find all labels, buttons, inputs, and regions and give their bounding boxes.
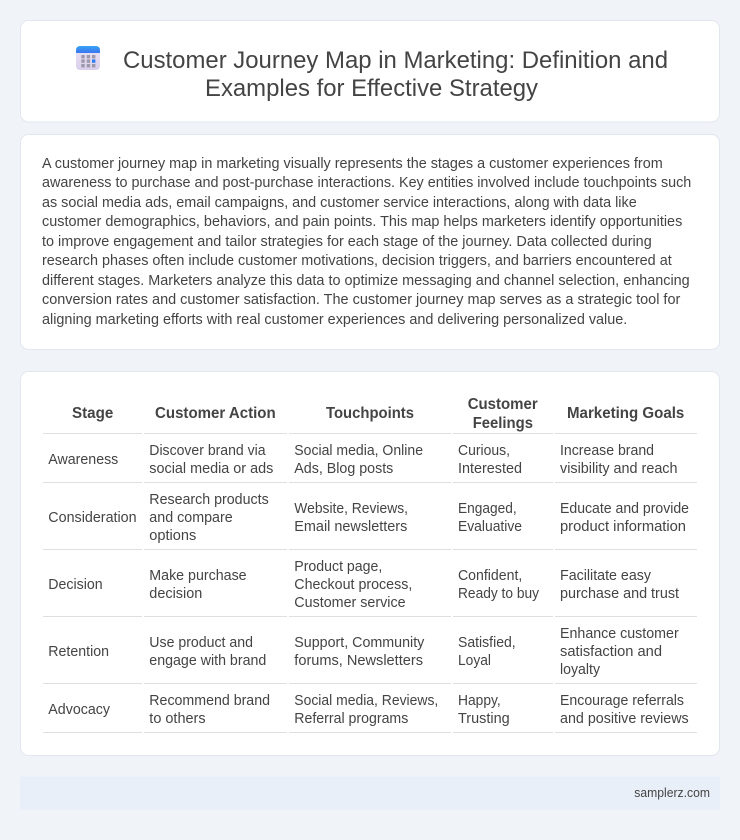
table row: Awareness: visibility and reach [560, 461, 678, 477]
table header row [72, 396, 684, 432]
table row: Advocacy: Recommend brand [149, 693, 270, 709]
table row: Advocacy: Advocacy [48, 702, 111, 718]
text block: description paragraph: A customer journey map in marketing visually represents the stages a customer experiences from [42, 156, 663, 172]
table row: Retention: satisfaction and [560, 644, 662, 660]
table row: Retention: engage with brand [149, 653, 266, 669]
table row: Retention: forums, Newsletters [294, 653, 423, 669]
text block: description paragraph: awareness to purchase and post-purchase interactions. Key entities involved include touchpoints such [42, 175, 691, 191]
table row: Awareness: Discover brand via [149, 443, 266, 459]
table row: Advocacy: Referral programs [294, 711, 408, 727]
table header row: Touchpoints [326, 405, 414, 422]
table row: Decision: Make purchase [149, 568, 247, 584]
table row: Advocacy: Encourage referrals [560, 693, 684, 709]
table row: Decision: Product page, [294, 559, 382, 575]
table row: Decision: Customer service [294, 595, 406, 611]
table row: Awareness: social media or ads [149, 461, 273, 477]
table row: Decision: Facilitate easy [560, 568, 652, 584]
table header row: Customer [468, 396, 538, 413]
panel: header [20, 20, 720, 122]
table row: Advocacy: Trusting [458, 711, 510, 727]
table row: Retention: Satisfied, [458, 635, 516, 651]
table row: Consideration: Engaged, [458, 501, 517, 517]
table row: Retention: Loyal [458, 653, 491, 669]
table row: Retention: Support, Community [294, 635, 425, 651]
table row: Consideration: options [149, 528, 196, 544]
table row: Consideration: Research products [149, 492, 269, 508]
table row: Consideration [48, 492, 689, 544]
table row: Advocacy [48, 693, 689, 727]
table row: Consideration: and compare [149, 510, 233, 526]
table row: Advocacy: Social media, Reviews, [294, 693, 438, 709]
table row: Decision: Checkout process, [294, 577, 412, 593]
table row: Advocacy: and positive reviews [560, 711, 689, 727]
table row: Retention [48, 626, 679, 678]
table row: Awareness: Increase brand [560, 443, 654, 459]
text block: description paragraph: to improve engagement and tailor strategies for each stage of the journey. Data collected during [42, 234, 652, 250]
table header row: Customer Action [155, 405, 276, 422]
title: Examples for Effective Strategy [205, 75, 538, 102]
table row: Consideration: Website, Reviews, [294, 501, 408, 517]
footer bar: samplerz.com [634, 785, 710, 800]
table row: Retention: Use product and [149, 635, 253, 651]
table row: Decision: purchase and trust [560, 586, 679, 602]
text block: description paragraph: customer demographics, behaviors, and pain points. This map helps marketers identify opportunities [42, 214, 682, 230]
panel: journey table [20, 372, 720, 756]
table row: Awareness: Interested [458, 461, 522, 477]
text block: description paragraph: different stages. Marketers analyze this data to optimize messaging and channel selection, enhancing [42, 273, 690, 289]
table header row: Marketing Goals [567, 405, 684, 422]
text block: description paragraph: aligning marketing efforts with real customer experiences and delivering personalized value. [42, 312, 627, 328]
table row: Decision: Ready to buy [458, 586, 540, 602]
table row: Consideration: Consideration [48, 510, 137, 526]
table row: Consideration: product information [560, 519, 686, 535]
table row: Consideration: Email newsletters [294, 519, 407, 535]
table row: Advocacy: Happy, [458, 693, 501, 709]
table row: Awareness: Curious, [458, 443, 510, 459]
table row: Consideration: Educate and provide [560, 501, 689, 517]
table row: Retention: loyalty [560, 662, 601, 678]
table row: Decision: decision [149, 586, 202, 602]
table row: Awareness: Ads, Blog posts [294, 461, 393, 477]
table row: Awareness: Social media, Online [294, 443, 423, 459]
text block: description paragraph: as social media ads, email campaigns, and customer service interactions, along with data like [42, 195, 637, 211]
table row: Retention: Enhance customer [560, 626, 679, 642]
title [123, 47, 668, 102]
table row: Awareness: Awareness [48, 452, 118, 468]
text block: description paragraph: conversion rates and customer satisfaction. The customer journey map serves as a strategic tool for [42, 292, 680, 308]
footer bar [20, 776, 720, 810]
table header row: Feelings [473, 415, 533, 432]
table row: Advocacy: to others [149, 711, 206, 727]
text block: description paragraph: research phases often include customer motivations, decision triggers, and barriers encountered at [42, 253, 672, 269]
panel: description [20, 134, 720, 350]
table row: Retention: Retention [48, 644, 109, 660]
table row: Decision: Confident, [458, 568, 522, 584]
table row: Consideration: Evaluative [458, 519, 522, 535]
icon: calendar [76, 46, 100, 70]
text block: description paragraph [42, 156, 691, 328]
table row: Awareness [48, 443, 678, 477]
table row: Decision: Decision [48, 577, 103, 593]
table header row: Stage [72, 405, 114, 422]
table row: Decision [48, 559, 679, 611]
title: Customer Journey Map in Marketing: Definition and [123, 47, 668, 74]
